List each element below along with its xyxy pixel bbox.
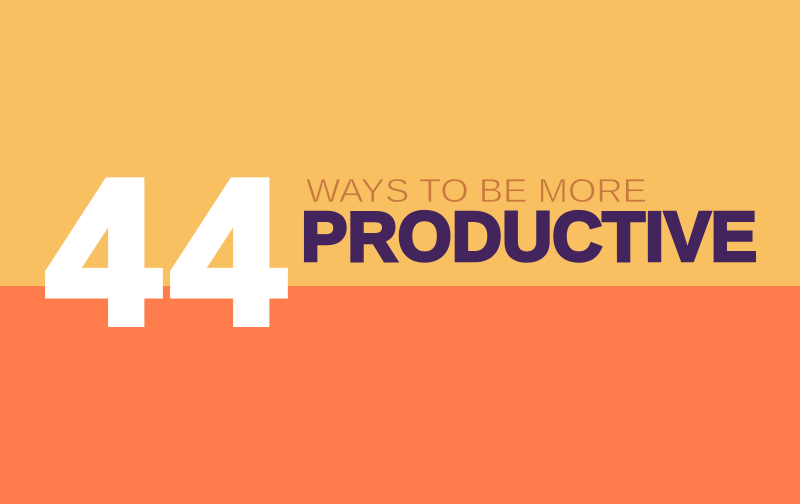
panel: top yellow background — [0, 0, 800, 286]
subtitle: ways to be more: WAYS TO BE MORE — [306, 172, 647, 209]
big number 44: 4 — [172, 139, 284, 366]
panel: bottom orange background — [0, 286, 800, 504]
big number 44: 4 — [47, 139, 159, 366]
big number 44 — [47, 139, 284, 366]
title: productive: PRODUCTIVE — [301, 198, 757, 276]
